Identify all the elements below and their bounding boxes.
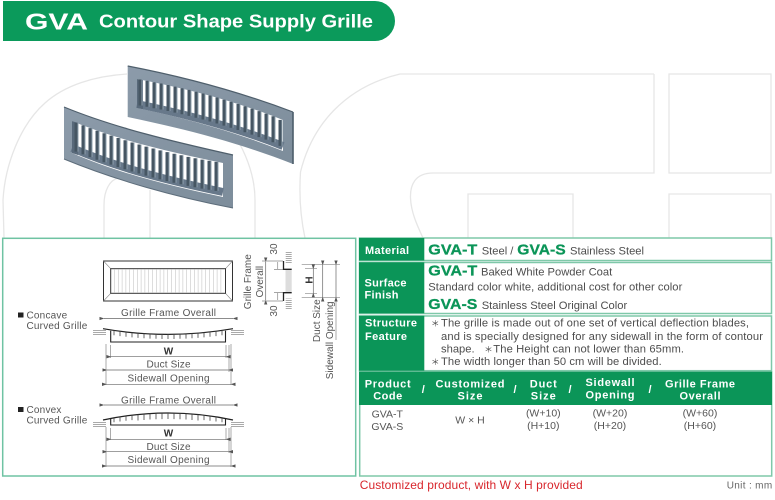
panel: surface finish: Surface <box>364 277 406 289</box>
height dimensions <box>302 264 340 379</box>
table header <box>359 372 772 405</box>
side section with frame dimensions <box>243 243 292 317</box>
panel: structure feature: ＊ <box>431 357 440 367</box>
table header: Size <box>531 390 556 402</box>
convex section diagram: Duct Size <box>146 442 191 453</box>
panel: size table <box>359 372 772 476</box>
panel: structure feature: The width longer than 50 cm will be divided. <box>441 356 662 368</box>
product image: lower concave grille <box>64 107 233 208</box>
panel: structure feature: The grille is made out of one set of vertical deflection blades, <box>441 318 749 330</box>
table data row: (H+10) <box>527 420 559 432</box>
side section with frame dimensions: 30 <box>269 305 280 317</box>
table header: Product <box>365 378 411 390</box>
panel: structure feature: shape. <box>441 344 475 356</box>
table header: / <box>422 384 425 396</box>
panel: surface finish: Baked White Powder Coat <box>481 267 613 279</box>
panel: surface finish <box>359 262 772 314</box>
table header: / <box>513 384 517 396</box>
product image: upper convex grille <box>128 66 293 164</box>
height dimensions: Duct Size <box>312 299 323 342</box>
table header: Duct <box>530 378 557 390</box>
table header: / <box>568 384 572 396</box>
table header: Customized <box>436 378 504 390</box>
table data row: (W+20) <box>593 408 627 420</box>
table header: Opening <box>586 390 634 402</box>
table header: / <box>648 384 652 396</box>
table header: Overall <box>680 390 720 402</box>
panel: surface finish: Standard color white, additional cost for other color <box>428 282 683 294</box>
table data row: (H+60) <box>684 420 716 432</box>
panel: structure feature: ＊ <box>431 318 440 328</box>
concave curved grille label: Concave <box>26 310 68 322</box>
panel: material <box>359 238 772 260</box>
convex section diagram: Grille Frame Overall <box>121 396 216 406</box>
panel: surface finish: Finish <box>364 290 399 302</box>
panel: structure feature: Structure <box>365 318 417 330</box>
panel: structure feature <box>359 316 772 371</box>
panel: material: Steel / <box>482 245 514 257</box>
convex curved grille label: Curved Grille <box>26 416 88 426</box>
height dimensions: Sidewall Opening <box>325 301 336 379</box>
panel: structure feature: The Height can not lower than 65mm. <box>493 344 684 356</box>
concave curved grille label: Curved Grille <box>26 321 88 332</box>
side section with frame dimensions: Overall <box>255 266 266 298</box>
table data row: W × H <box>455 414 485 426</box>
title: product code: GVA <box>25 8 88 34</box>
title: product name: Contour Shape Supply Grille <box>99 12 373 32</box>
front view of grille <box>104 261 232 301</box>
panel: material: GVA-S <box>517 242 566 258</box>
convex curved grille label <box>18 405 88 426</box>
panel: material: Stainless Steel <box>570 245 644 257</box>
watermark logo outlines <box>3 74 771 238</box>
concave section diagram: Grille Frame Overall <box>121 308 216 319</box>
panel: structure feature: ＊ <box>484 344 493 354</box>
table data row <box>371 408 717 433</box>
concave section diagram: Duct Size <box>146 360 191 370</box>
convex section diagram: Sidewall Opening <box>128 455 210 466</box>
convex curved grille label: Convex <box>26 405 62 416</box>
panel: surface finish: GVA-S <box>428 296 477 313</box>
height dimensions: H <box>304 276 316 284</box>
table header: Code <box>373 390 402 402</box>
side section with frame dimensions: Grille Frame <box>243 254 254 309</box>
concave section diagram <box>93 308 244 385</box>
panel: surface finish: Stainless Steel Original Color <box>482 300 627 312</box>
table header: Sidewall <box>586 377 634 389</box>
panel: structure feature: and is specially designed for any sidewall in the form of contour <box>441 331 763 343</box>
panel: dimension drawings <box>3 238 356 476</box>
table data row: (H+20) <box>594 420 626 432</box>
table header: Size <box>458 390 482 402</box>
table data row: GVA-T <box>372 409 404 421</box>
note: customized product: Customized product, with W x H provided <box>360 478 583 492</box>
table data row: GVA-S <box>371 421 403 433</box>
table data row: (W+60) <box>683 408 717 420</box>
panel: structure feature: Feature <box>365 331 407 343</box>
note: unit: Unit : mm <box>727 481 772 492</box>
concave section diagram: W <box>164 346 174 358</box>
panel: material: GVA-T <box>428 242 477 258</box>
concave curved grille label <box>18 310 88 332</box>
convex section diagram <box>93 396 244 467</box>
title banner <box>3 1 395 41</box>
panel: surface finish: GVA-T <box>428 263 477 280</box>
table data row: (W+10) <box>526 408 561 420</box>
table header: Grille Frame <box>665 378 735 390</box>
convex section diagram: W <box>164 428 174 440</box>
side section with frame dimensions: 30 <box>269 243 280 255</box>
panel: material: Material <box>365 245 409 257</box>
concave section diagram: Sidewall Opening <box>128 374 210 384</box>
